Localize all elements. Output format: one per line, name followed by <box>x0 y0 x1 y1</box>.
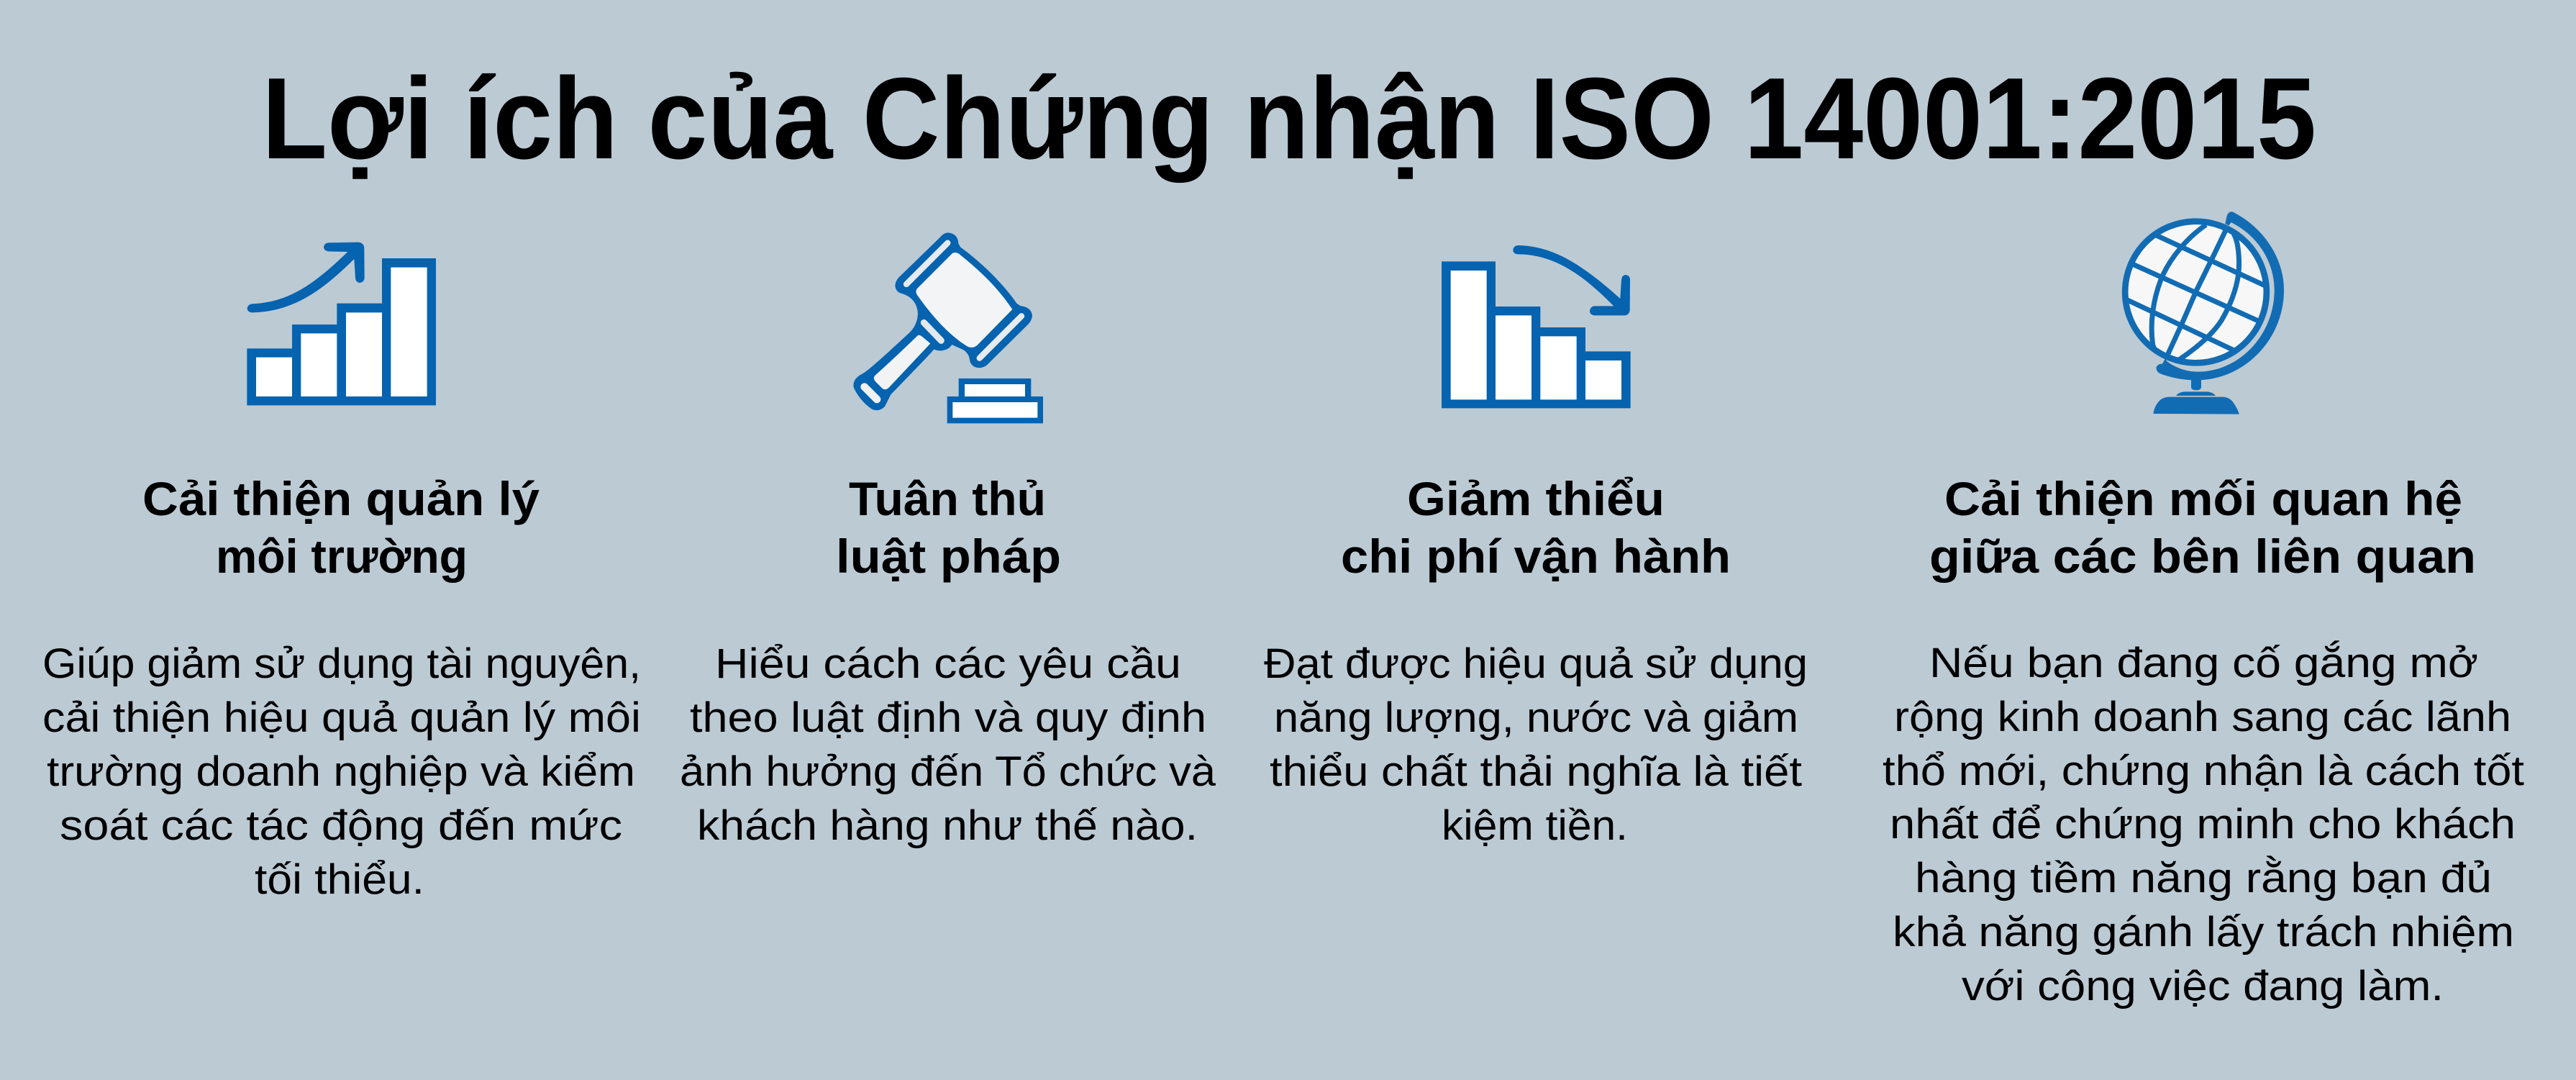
text: legal compliance description: Hiểu cách các yêu cầu <box>715 640 1181 687</box>
icon: gavel <box>853 232 1043 423</box>
heading: environmental management: Cải thiện quản lý <box>142 472 540 525</box>
text: operating costs description <box>1264 640 1808 849</box>
icon: rising bar chart with arrow <box>247 242 436 405</box>
panel: legal compliance <box>680 232 1216 849</box>
heading: stakeholder relations: giữa các bên liên quan <box>1929 530 2476 583</box>
panel: stakeholder relations <box>1883 212 2524 1009</box>
heading: legal compliance: luật pháp <box>836 530 1061 583</box>
heading: operating costs: Giảm thiểu <box>1407 472 1665 525</box>
text: environmental management description <box>42 640 641 903</box>
text: stakeholder relations description: rộng kinh doanh sang các lãnh <box>1894 694 2511 740</box>
text: stakeholder relations description: khả năng gánh lấy trách nhiệm <box>1893 909 2514 956</box>
heading: operating costs: chi phí vận hành <box>1341 530 1731 583</box>
text: stakeholder relations description <box>1883 640 2524 1009</box>
heading: environmental management: môi trường <box>216 530 468 583</box>
text: environmental management description: tối thiểu. <box>255 856 424 903</box>
text: legal compliance description: khách hàng như thế nào. <box>697 802 1198 849</box>
text: environmental management description: trường doanh nghiệp và kiểm <box>47 748 635 795</box>
text: stakeholder relations description: Nếu bạn đang cố gắng mở <box>1929 640 2478 686</box>
text: environmental management description: cải thiện hiệu quả quản lý môi <box>42 694 641 741</box>
heading: environmental management <box>142 472 540 583</box>
icon: globe <box>2124 212 2284 414</box>
text: legal compliance description: theo luật định và quy định <box>690 694 1206 741</box>
text: operating costs description: thiểu chất thải nghĩa là tiết <box>1270 748 1802 795</box>
heading: stakeholder relations <box>1929 472 2476 583</box>
heading: legal compliance: Tuân thủ <box>849 472 1046 525</box>
text: environmental management description: Giúp giảm sử dụng tài nguyên, <box>42 640 641 687</box>
text: legal compliance description: ảnh hưởng đến Tổ chức và <box>680 748 1216 795</box>
text: stakeholder relations description: hàng tiềm năng rằng bạn đủ <box>1915 855 2492 902</box>
heading: stakeholder relations: Cải thiện mối quan hệ <box>1944 472 2462 525</box>
text: stakeholder relations description: với công việc đang làm. <box>1962 963 2444 1009</box>
heading: operating costs <box>1341 472 1731 583</box>
panel: environmental management <box>42 242 641 903</box>
text: stakeholder relations description: thổ mới, chứng nhận là cách tốt <box>1883 748 2524 794</box>
text: environmental management description: soát các tác động đến mức <box>60 802 622 849</box>
text: operating costs description: Đạt được hiệu quả sử dụng <box>1264 640 1808 687</box>
text: operating costs description: năng lượng, nước và giảm <box>1274 694 1798 741</box>
panel: operating costs <box>1264 245 1808 849</box>
text: operating costs description: kiệm tiền. <box>1442 802 1628 849</box>
text: stakeholder relations description: nhất để chứng minh cho khách <box>1890 801 2516 848</box>
title: Lợi ích của Chứng nhận ISO 14001:2015 <box>262 54 2316 183</box>
heading: legal compliance <box>836 472 1061 583</box>
text: legal compliance description <box>680 640 1216 849</box>
icon: falling bar chart with arrow <box>1442 245 1631 408</box>
